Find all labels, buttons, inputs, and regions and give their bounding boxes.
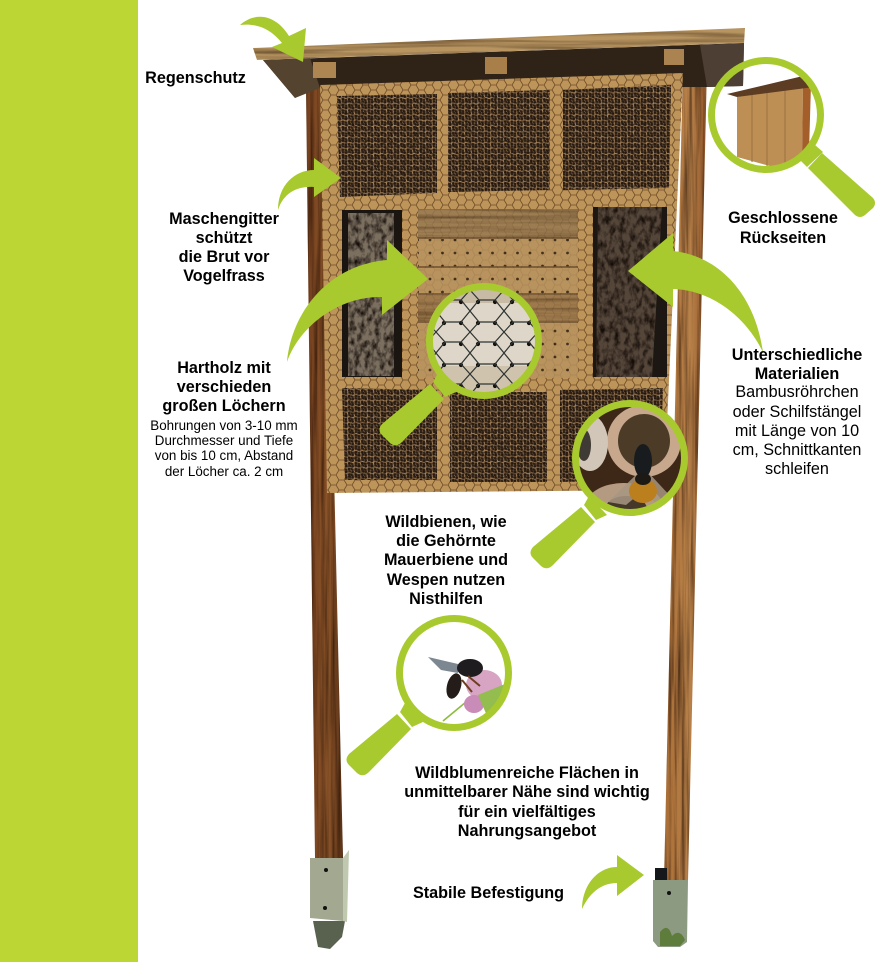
label: Regenschutz: Regenschutz (145, 69, 246, 87)
label: Maschengitter (169, 210, 280, 285)
magnifier: wild bee on clover (346, 618, 508, 775)
label: Geschlossene Rückseiten: Geschlossene (728, 209, 838, 227)
label: Maschengitter: Vogelfrass (183, 267, 265, 285)
label: Unterschiedliche Materialien: oder Schilfstängel (733, 403, 861, 421)
label: Hartholz: Hartholz mit (177, 359, 271, 377)
label: Hartholz: der Löcher ca. 2 cm (165, 464, 283, 479)
label: Geschlossene Rückseiten (728, 209, 838, 247)
reed cells upper row (337, 85, 671, 197)
insect hotel structure (253, 28, 745, 949)
green side band (0, 0, 138, 962)
label: Wildbienen (384, 513, 508, 608)
label: Hartholz (150, 359, 298, 479)
roof (253, 28, 745, 98)
label: Wildblumen: Nahrungsangebot (458, 822, 597, 840)
label: Wildbienen: Wildbienen, wie (385, 513, 507, 531)
label: Wildblumen (404, 764, 650, 840)
reed cells lower row (342, 388, 663, 482)
label: Hartholz: Durchmesser und Tiefe (155, 433, 293, 448)
arrow: roof (240, 17, 306, 62)
label: Wildbienen: die Gehörnte (396, 532, 496, 550)
label: Maschengitter: Maschengitter (169, 210, 280, 228)
label: Wildblumen: für ein vielfältiges (458, 803, 596, 821)
magnifier: hardwood detail (380, 286, 538, 445)
label: Maschengitter: die Brut vor (179, 248, 270, 266)
arrow: fastening (582, 855, 644, 909)
arrow: materials (628, 233, 763, 352)
label: Stabile Befestigung: Stabile Befestigung (413, 884, 564, 902)
right post (664, 65, 707, 880)
label: Unterschiedliche Materialien (732, 346, 862, 478)
label: Wildbienen: Mauerbiene und (384, 551, 508, 569)
label: Geschlossene Rückseiten: Rückseiten (740, 229, 826, 247)
label: Unterschiedliche Materialien: Materialien (755, 365, 839, 383)
label: Wildbienen: Wespen nutzen (387, 571, 505, 589)
label: Hartholz: von bis 10 cm, Abstand (155, 448, 293, 463)
label: Unterschiedliche Materialien: cm, Schnittkanten (733, 441, 861, 459)
label: Wildbienen: Nisthilfen (409, 590, 483, 608)
hardwood block (403, 206, 593, 390)
label: Hartholz: großen Löchern (162, 397, 286, 415)
magnifier: bee at nest tube (530, 404, 685, 568)
label: Unterschiedliche Materialien: schleifen (765, 460, 829, 478)
right foot bracket (653, 868, 688, 947)
left bark cell (342, 210, 402, 377)
label: Unterschiedliche Materialien: Bambusröhrchen (735, 383, 859, 401)
wire-covered frame (320, 73, 683, 493)
arrow: mesh (278, 158, 341, 210)
label: Maschengitter: schützt (196, 229, 253, 247)
label: Unterschiedliche Materialien: mit Länge von 10 (735, 422, 859, 440)
left post (306, 85, 343, 858)
label: Hartholz: Bohrungen von 3-10 mm (150, 418, 298, 433)
label: Wildblumen: Wildblumenreiche Flächen in (415, 764, 639, 782)
label: Unterschiedliche Materialien: Unterschiedliche (732, 346, 862, 364)
arrow: hardwood (287, 240, 428, 362)
left foot bracket (310, 850, 349, 949)
label: Wildblumen: unmittelbarer Nähe sind wichtig (404, 783, 650, 801)
magnifier: closed back side (712, 60, 875, 217)
right bark cell (593, 207, 667, 377)
label: Hartholz: verschieden (177, 378, 271, 396)
